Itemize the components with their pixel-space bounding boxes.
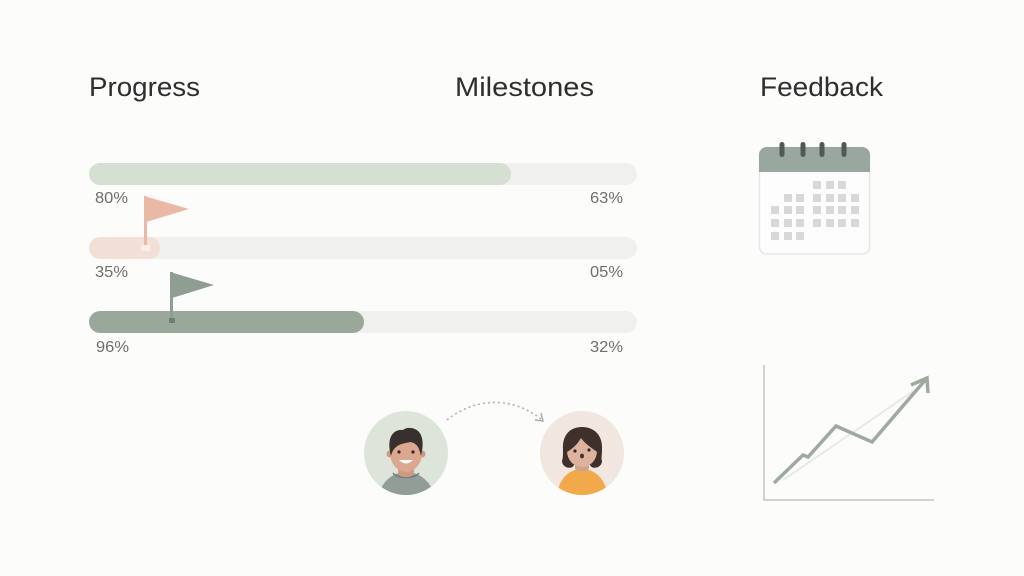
label: bar 1 left value: 80%	[95, 190, 128, 207]
label: bar 3 left value: 96%	[96, 339, 129, 356]
heading: Progress: Progress	[89, 72, 200, 102]
icon: green milestone flag	[169, 272, 214, 323]
progress bar 2	[89, 237, 637, 259]
label: bar 1 right value: 63%	[590, 190, 623, 207]
progress bar 1	[89, 163, 637, 185]
arrow: dotted handoff arrow	[447, 402, 543, 421]
icon: peach milestone flag	[141, 196, 189, 251]
label: bar 2 right value: 05%	[590, 264, 623, 281]
label: bar 3 right value: 32%	[590, 339, 623, 356]
label: bar 2 left value: 35%	[95, 264, 128, 281]
avatar: man	[364, 411, 448, 497]
avatar: woman	[540, 411, 624, 497]
heading: Milestones: Milestones	[455, 72, 594, 102]
chart: rising trend line	[764, 365, 934, 500]
icon: calendar	[759, 142, 870, 254]
heading: Feedback: Feedback	[760, 72, 884, 102]
progress bar 3	[89, 311, 637, 333]
